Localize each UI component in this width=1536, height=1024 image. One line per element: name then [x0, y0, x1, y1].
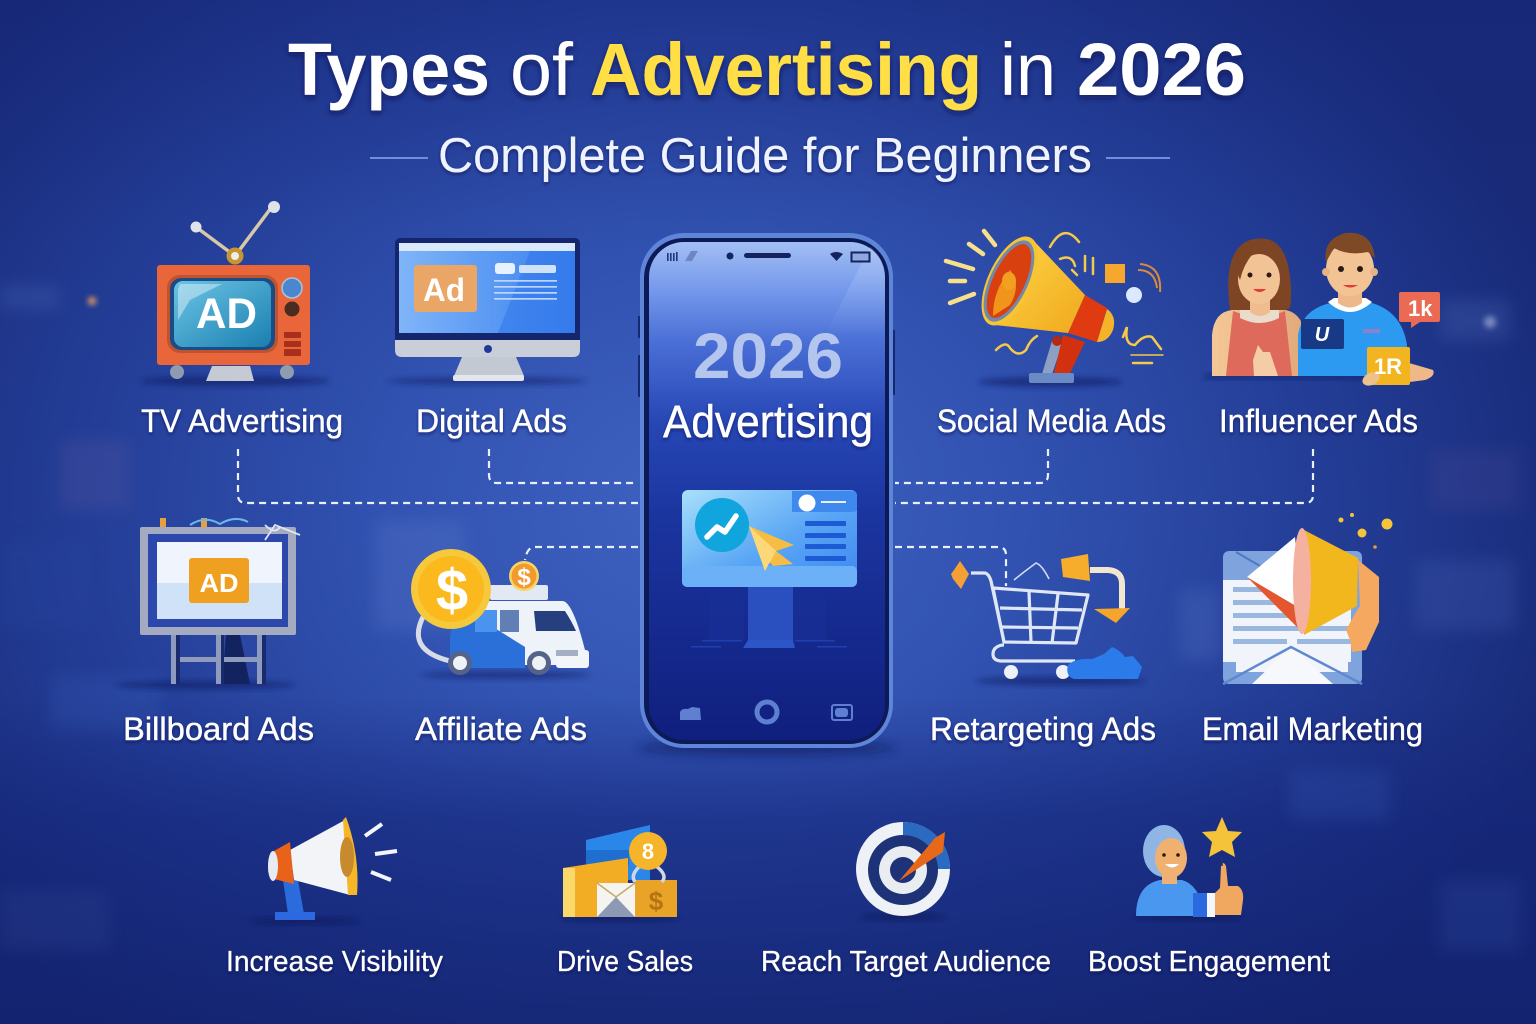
icon: email marketing [1223, 513, 1392, 684]
icon: target [856, 822, 950, 920]
label: Digital Ads: Digital Ads [416, 403, 567, 439]
woman [1212, 238, 1306, 376]
badge: gold [1360, 347, 1434, 388]
label: Increase Visibility: Increase Visibility [226, 946, 443, 978]
icon: shopping cart [951, 554, 1145, 685]
icon: boost engagement [1133, 817, 1243, 920]
icon: TV: AD [196, 290, 257, 338]
icon: TV [140, 201, 330, 386]
title: of [510, 28, 573, 111]
icon: affiliate van: $ [436, 558, 468, 623]
icon: increase visibility [250, 817, 397, 924]
label: TV Advertising: TV Advertising [141, 403, 343, 439]
title: Types [288, 28, 490, 111]
ad card [682, 490, 857, 648]
icon: billboard [115, 518, 300, 689]
badge: navy [1301, 319, 1344, 349]
side buttons [638, 316, 895, 397]
badge: 1k: 1k [1408, 296, 1433, 321]
title: 2026 [1077, 28, 1246, 111]
icon: drive sales: 8 [642, 839, 654, 864]
icon: drive sales: $ [649, 886, 664, 916]
phone text: 2026: 2026 [693, 320, 843, 392]
label: Billboard Ads: Billboard Ads [123, 711, 314, 747]
icon: influencers [1205, 233, 1440, 388]
icon: affiliate van [411, 549, 590, 679]
icon: digital monitor: Ad [423, 272, 465, 308]
icon: drive sales [560, 825, 680, 921]
badge: navy: U [1315, 324, 1330, 346]
connector lines [238, 449, 1313, 586]
icon: affiliate van: $ [517, 564, 531, 591]
phone [637, 233, 897, 756]
man [1298, 233, 1407, 376]
title: Advertising [590, 28, 982, 111]
label: Boost Engagement: Boost Engagement [1088, 946, 1330, 978]
subtitle: Complete Guide for Beginners [438, 129, 1092, 183]
status bar [667, 251, 870, 262]
label: Influencer Ads: Influencer Ads [1219, 403, 1418, 439]
badge: 1k [1399, 292, 1440, 328]
label: Drive Sales: Drive Sales [557, 946, 693, 978]
title [288, 28, 1246, 111]
title: in [1000, 28, 1056, 111]
icon: social media megaphone [946, 228, 1163, 387]
label: Email Marketing: Email Marketing [1202, 711, 1423, 747]
label: Reach Target Audience: Reach Target Audience [761, 946, 1051, 978]
label: Affiliate Ads: Affiliate Ads [415, 711, 587, 747]
phone text: Advertising: Advertising [663, 396, 873, 447]
icon: billboard: AD [200, 568, 238, 598]
label: Retargeting Ads: Retargeting Ads [930, 711, 1156, 747]
badge: gold: 1R [1374, 354, 1402, 379]
phone nav icons [680, 702, 852, 722]
icon: digital monitor [387, 238, 587, 385]
label: Social Media Ads: Social Media Ads [937, 403, 1166, 439]
